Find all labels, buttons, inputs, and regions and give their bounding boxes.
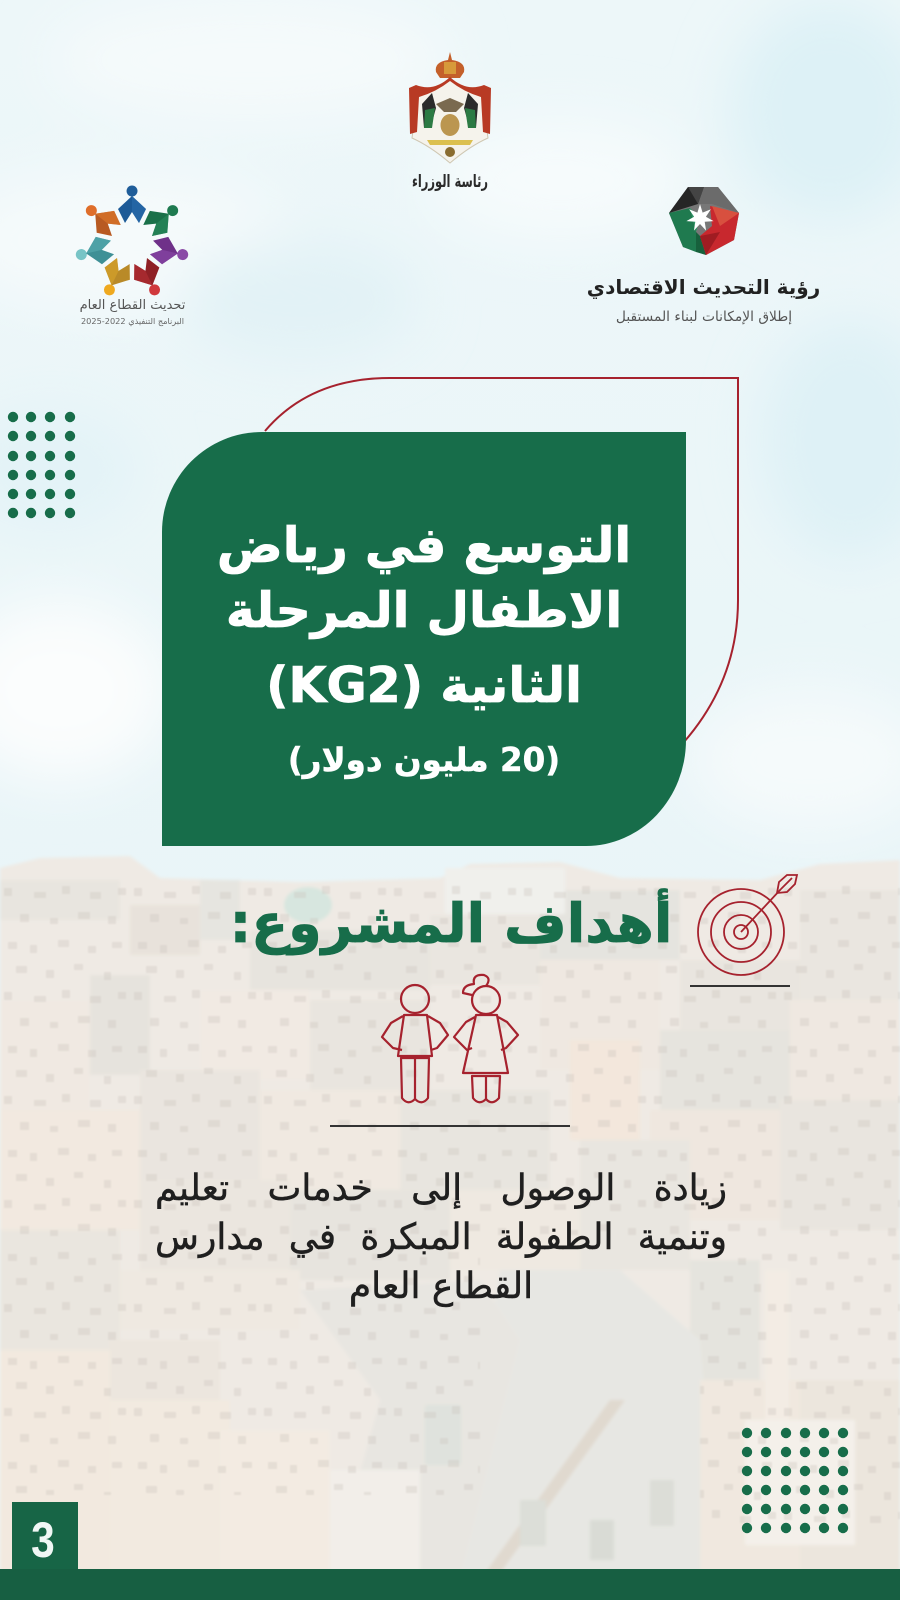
logo: Prime Ministry emblem [409,52,491,192]
logo title: تحديث القطاع العام [80,298,185,313]
vision tagline: إطلاق الإمكانات لبناء المستقبل [616,309,792,325]
logo subtitle: البرنامج التنفيذي 2022-2025 [81,316,184,326]
flags and eagle [422,93,478,128]
boy [382,985,448,1102]
vision title: رؤية التحديث الاقتصادي [587,275,820,299]
crown [436,52,464,78]
divider under target [690,985,790,986]
globe [440,114,460,136]
title line 1: التوسع في رياض [217,517,631,574]
title panel [162,432,686,846]
ring of figures [76,186,188,296]
bottom green bar [0,1569,900,1600]
decorative dots: bottom right [742,1428,848,1534]
page number box: 3 [31,1512,55,1568]
logo: Public sector modernisation [76,186,188,326]
red outline behind title panel [264,377,739,742]
divider under children [330,1125,570,1126]
decorative dots: top left [8,412,76,518]
mantle [409,77,491,134]
ribbon and star [427,140,473,157]
icon: boy and girl with backpacks [380,974,520,1104]
polygon mark [669,187,739,255]
shield [412,79,488,163]
objective text [155,1168,727,1308]
title line 2: الاطفال المرحلة [226,582,622,639]
line 1: زيادة الوصول إلى خدمات تعليم [155,1168,727,1209]
title cost: (20 مليون دولار) [288,741,560,779]
girl [454,975,518,1102]
line 3: القطاع العام [349,1266,533,1307]
line 2: وتنمية الطفولة المبكرة في مدارس [155,1217,727,1258]
title line 3: الثانية (KG2) [266,657,582,714]
page number box [12,1502,78,1569]
heading: project goals: أهداف المشروع: [230,892,672,955]
icon: target with arrow [697,874,798,976]
logo: Economic modernisation vision [587,187,820,325]
